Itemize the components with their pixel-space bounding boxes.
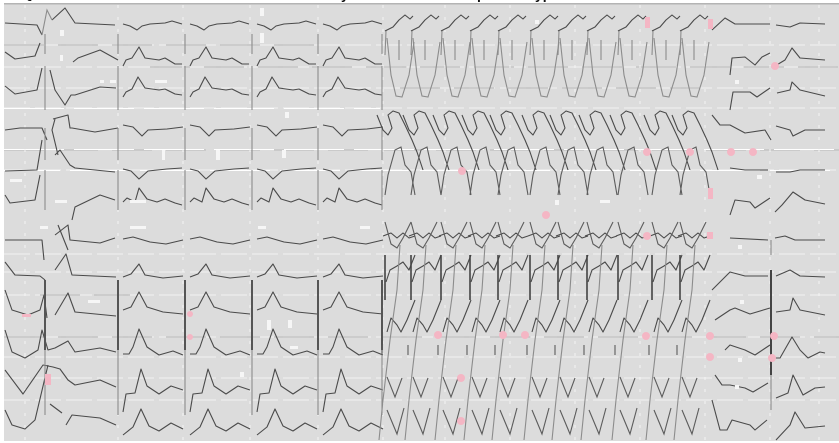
- leads: ventricular tachycardia run: [377, 15, 718, 440]
- noise specks: [10, 8, 762, 389]
- cropped title text: [22, 0, 551, 2]
- leads: first wide complex and sinus rhythm: [5, 8, 383, 435]
- leads: return to sinus rhythm: [712, 18, 825, 440]
